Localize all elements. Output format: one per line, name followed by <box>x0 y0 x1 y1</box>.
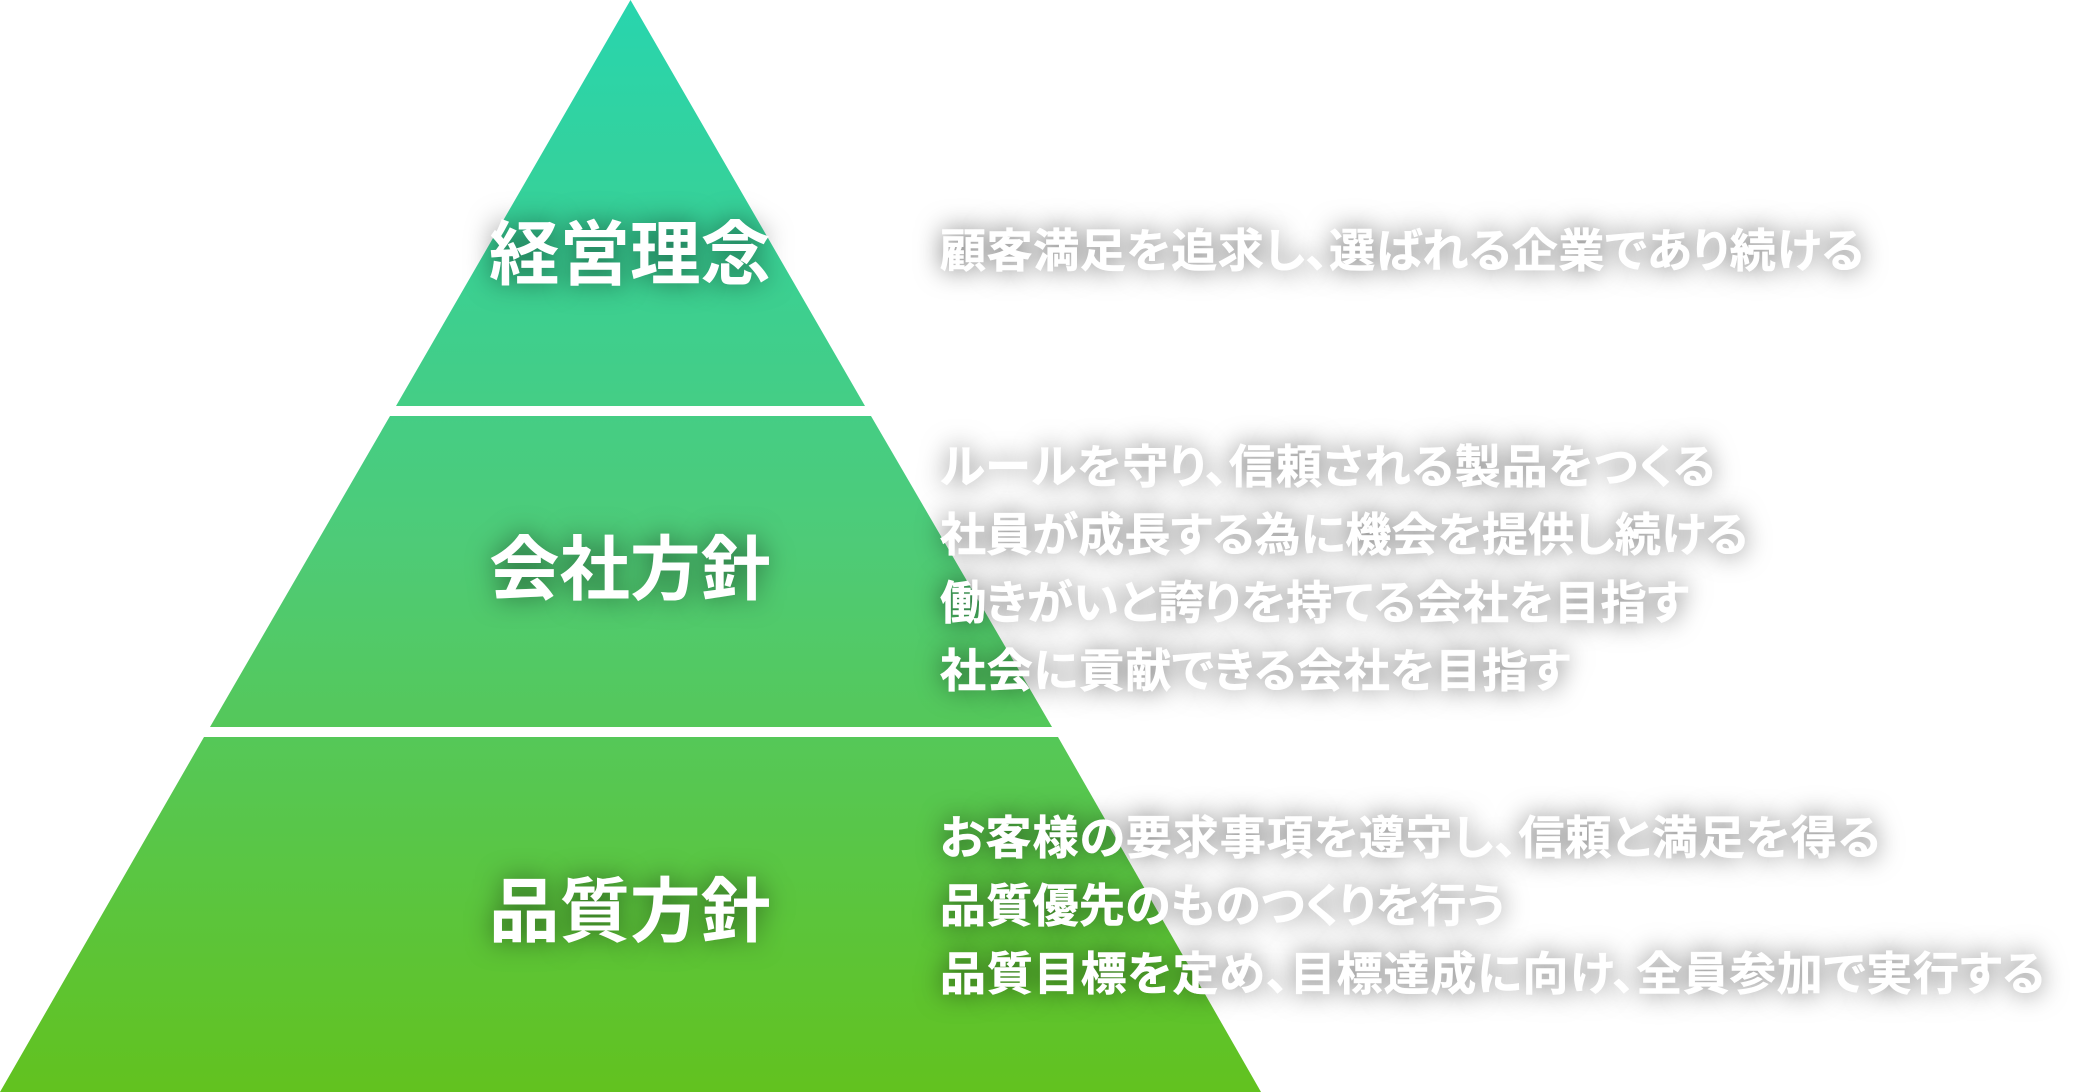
text block: 会社方針 description: 働きがいと誇りを持てる会社を目指す <box>940 577 1689 629</box>
pyramid tier: middle <box>210 416 1052 727</box>
pyramid tier: top <box>396 0 865 406</box>
text block: 会社方針 description <box>928 428 1758 708</box>
text block: 品質方針 description <box>929 798 2055 1012</box>
text block: 会社方針 description: 社会に貢献できる会社を目指す <box>940 645 1571 697</box>
text block: 品質方針 description: 品質優先のものつくりを行う <box>940 880 1505 932</box>
heading: 経営理念: 経営理念 <box>489 215 771 294</box>
pyramid tier: bottom <box>0 737 1261 1092</box>
text block: 品質方針 description: 品質目標を定め、目標達成に向け、全員参加で実行する <box>940 948 2045 1000</box>
text block: 経営理念 description: 顧客満足を追求し、選ばれる企業であり続ける <box>940 225 1864 277</box>
heading: 品質方針: 品質方針 <box>489 872 771 951</box>
heading: 会社方針: 会社方針 <box>489 530 771 609</box>
text block: 品質方針 description: お客様の要求事項を遵守し、信頼と満足を得る <box>940 812 1881 864</box>
text block: 会社方針 description: ルールを守り、信頼される製品をつくる <box>940 441 1716 493</box>
text block: 会社方針 description: 社員が成長する為に機会を提供し続ける <box>940 509 1748 561</box>
